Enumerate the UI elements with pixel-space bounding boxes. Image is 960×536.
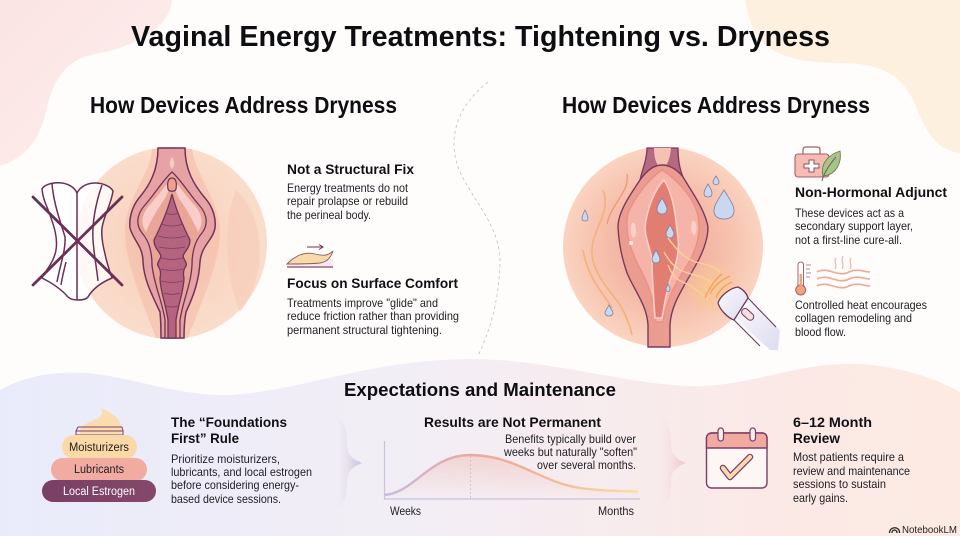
text block: 6-12 month review: sessions to sustain xyxy=(793,478,886,491)
text block: non-hormonal adjunct: secondary support layer, xyxy=(795,220,913,233)
text block: foundations first rule: based device sessions. xyxy=(171,493,281,506)
text block: 6-12 month review: early gains. xyxy=(793,492,848,505)
text block: controlled heat: Controlled heat encourages xyxy=(795,299,927,312)
background blob: top left pink xyxy=(0,0,172,166)
text block: controlled heat: blood flow. xyxy=(795,326,846,339)
text block: 6-12 month review: review and maintenance xyxy=(793,465,910,478)
pill: local estrogen: Local Estrogen xyxy=(63,486,135,498)
icon: first aid kit with leaf xyxy=(795,147,840,181)
text block: not a structural fix: repair prolapse or rebuild xyxy=(287,195,408,208)
line chart: benefit over time xyxy=(384,441,640,518)
text block: not a structural fix: Energy treatments do not xyxy=(287,182,409,195)
icon: water drops xyxy=(582,176,734,316)
text block: focus on surface comfort: permanent structural tightening. xyxy=(287,324,442,337)
text block: 6-12 month review: Review xyxy=(793,430,840,446)
text block: results are not permanent xyxy=(424,414,637,472)
dashed column divider xyxy=(454,82,500,356)
text block: foundations first rule: The “Foundations xyxy=(171,414,287,430)
text block: focus on surface comfort: Focus on Surface Comfort xyxy=(287,275,458,291)
heading: right column: How Devices Address Dryness xyxy=(562,92,870,118)
pill: moisturizers: Moisturizers xyxy=(69,442,129,454)
text block: not a structural fix: Not a Structural Fix xyxy=(287,161,414,177)
text block: results are not permanent: Results are Not Permanent xyxy=(424,414,601,430)
text block: results are not permanent: over several months. xyxy=(537,459,636,472)
line chart: benefit over time: Weeks xyxy=(390,505,421,518)
icon: energy device wand xyxy=(718,287,780,350)
heading: left column: How Devices Address Dryness xyxy=(90,92,397,118)
text block: non-hormonal adjunct xyxy=(795,184,947,247)
illustration: anatomy cross-section with corset xyxy=(33,147,267,339)
text block: not a structural fix: the perineal body. xyxy=(287,209,371,222)
text block: foundations first rule: First” Rule xyxy=(171,430,239,446)
chevron arrow one xyxy=(332,415,362,510)
text block: 6-12 month review: Most patients require a xyxy=(793,451,905,464)
text block: focus on surface comfort: reduce friction rather than providing xyxy=(287,310,459,323)
text block: foundations first rule: Prioritize moisturizers, xyxy=(171,453,280,466)
bottom band background xyxy=(0,359,960,536)
icon: surface glide xyxy=(287,244,333,268)
text block: focus on surface comfort: Treatments improve "glide" and xyxy=(287,297,438,310)
energy waves and glow xyxy=(664,238,740,316)
text block: non-hormonal adjunct: not a first-line cure-all. xyxy=(795,234,902,247)
text block: foundations first rule: lubricants, and local estrogen xyxy=(171,466,312,479)
icon: thermometer and heat waves xyxy=(796,256,870,295)
text block: results are not permanent: Benefits typically build over xyxy=(505,433,636,446)
background blob: top right peach xyxy=(745,0,960,153)
brand mark: NotebookLM: NotebookLM xyxy=(902,525,957,536)
text block: 6-12 month review: 6–12 Month xyxy=(793,414,872,430)
illustration: anatomy with moisture drops and energy device xyxy=(563,147,780,350)
text block: controlled heat: collagen remodeling and xyxy=(795,312,912,325)
text block: results are not permanent: weeks but naturally "soften" xyxy=(503,446,637,459)
heading: expectations and maintenance: Expectations and Maintenance xyxy=(344,379,616,400)
line chart: benefit over time: Months xyxy=(598,505,634,518)
text block: controlled heat xyxy=(795,299,927,339)
chevron arrow two xyxy=(656,415,686,510)
text block: non-hormonal adjunct: These devices act as a xyxy=(795,207,905,220)
title: Vaginal Energy Treatments: Tightening vs. Dryness xyxy=(131,21,830,53)
text block: not a structural fix xyxy=(287,161,414,222)
text block: foundations first rule: before considering energy- xyxy=(171,479,299,492)
pill: lubricants: Lubricants xyxy=(74,464,124,476)
icon: crossed-out corset xyxy=(33,183,122,300)
icon: calendar with check xyxy=(706,428,767,488)
text block: 6-12 month review xyxy=(793,414,910,505)
icon: foundations stack xyxy=(42,408,156,502)
text block: non-hormonal adjunct: Non-Hormonal Adjunct xyxy=(795,184,947,200)
text block: focus on surface comfort xyxy=(287,275,459,337)
text block: foundations first rule xyxy=(171,414,312,506)
